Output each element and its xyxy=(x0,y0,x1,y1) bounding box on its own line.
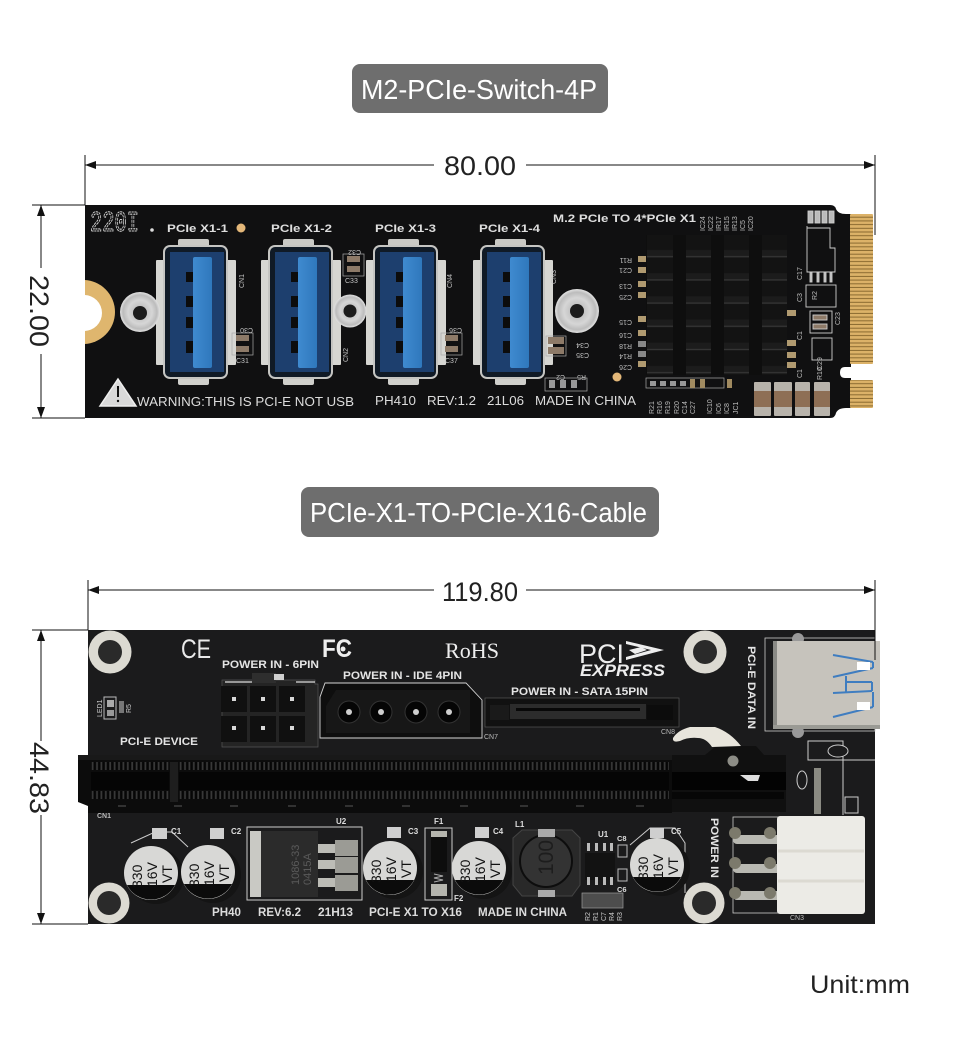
regulator U2 xyxy=(247,817,362,900)
capacitor C4: 330 xyxy=(457,859,473,883)
capacitor C1: C1 xyxy=(171,827,182,836)
U2 chip outline xyxy=(806,211,836,360)
heatsink side components silk: IC10 xyxy=(707,399,714,414)
slot latch xyxy=(672,727,786,812)
capacitor C3: C3 xyxy=(408,827,419,836)
bottom silkscreen text xyxy=(137,394,637,409)
CE mark: CE xyxy=(181,634,211,664)
heatsink side components silk: IR15 xyxy=(724,216,731,231)
small caps silk near USB ports: C36 xyxy=(449,326,462,333)
small caps silk near USB ports: CN1 xyxy=(239,274,246,288)
heatsink side components silk: C17 xyxy=(797,267,804,280)
heatsink side components silk: C26 xyxy=(619,363,632,370)
SATA 15-pin connector xyxy=(484,698,679,741)
capacitor C5: VT xyxy=(665,857,681,875)
heatsink side components silk: C21 xyxy=(619,266,632,273)
capacitor C5: C5 xyxy=(671,827,682,836)
dimension: height 22.00 xyxy=(24,205,85,418)
capacitor C5: 330 xyxy=(635,856,651,880)
small caps silk near USB ports: C31 xyxy=(236,358,249,365)
capacitor C3: 16V xyxy=(383,856,399,882)
capacitor C4: C4 xyxy=(493,827,504,836)
port labels: M.2 PCIe TO 4*PCIe X1 xyxy=(553,213,696,225)
heatsink side components silk: R14 xyxy=(619,352,632,359)
port labels xyxy=(167,213,696,235)
dimension: height 44.83: 44.83 xyxy=(24,742,54,814)
heatsink side components silk xyxy=(619,216,842,414)
SATA 15-pin connector: CN7 xyxy=(484,734,498,741)
small caps silk near USB ports: C32 xyxy=(348,248,361,255)
small caps silk near USB ports: C37 xyxy=(445,358,458,365)
chip U1: U1 xyxy=(598,830,609,839)
capacitor C2: VT xyxy=(216,864,232,882)
heatsink side components silk: IC8 xyxy=(724,403,731,414)
heatsink side components silk: IC22 xyxy=(708,216,715,231)
IDE 4-pin Molex connector xyxy=(320,683,482,738)
heatsink side components silk: IR13 xyxy=(732,216,739,231)
board outline xyxy=(85,205,851,418)
USB port 1 xyxy=(156,239,236,385)
bottom silkscreen text: PH410 xyxy=(375,394,416,408)
small caps silk near USB ports: CN2 xyxy=(343,348,350,362)
capacitor C4: VT xyxy=(487,860,503,878)
heatsink side components silk: C14 xyxy=(682,401,689,414)
heatsink side components silk: R18 xyxy=(619,342,632,349)
PCI Express logo: PCI xyxy=(579,639,624,669)
heading pill: M2-PCIe-Switch-4P: M2-PCIe-Switch-4P xyxy=(361,74,597,105)
chip U1: C8 xyxy=(617,834,627,843)
chip U1 xyxy=(585,830,627,894)
bottom silkscreen text: MADE IN CHINA xyxy=(535,394,637,408)
heatsink side components silk: C1 xyxy=(797,331,804,340)
small caps silk near USB ports xyxy=(232,248,589,391)
heatsink side components silk: C23 xyxy=(835,312,842,325)
6-pin power header: CN3 xyxy=(790,915,804,922)
heading pill: PCIe-X1-TO-PCIe-X16-Cable: PCIe-X1-TO-PCIe-X16-Cable xyxy=(310,497,647,528)
6-pin power header xyxy=(729,816,865,922)
heatsink side components silk: C29 xyxy=(817,357,824,370)
capacitor C5: 16V xyxy=(650,853,666,879)
dimension: height 44.83 xyxy=(24,630,88,924)
port labels: PCIe X1-1 xyxy=(167,223,228,235)
regulator U2: 0415A xyxy=(302,853,314,885)
heatsink side components silk: R16 xyxy=(657,401,664,414)
capacitor C2: 16V xyxy=(201,860,217,886)
capacitor C1: VT xyxy=(159,865,175,883)
heatsink side components silk: IC24 xyxy=(700,216,707,231)
dimension: height 22.00: 22.00 xyxy=(24,275,54,347)
connector labels: POWER IN - IDE 4PIN xyxy=(343,670,462,682)
heatsink side components silk: IC6 xyxy=(716,403,723,414)
standoff 2 xyxy=(334,294,366,328)
PCIe riser board xyxy=(78,630,880,924)
LED silk xyxy=(97,697,133,719)
regulator U2: 1086-33 xyxy=(290,845,302,885)
capacitor C4: 16V xyxy=(472,856,488,882)
capacitor C2 xyxy=(181,827,242,903)
heatsink side components silk: C16 xyxy=(619,331,632,338)
mounting holes xyxy=(88,630,726,924)
small resistors R1-R4: R3 xyxy=(617,912,624,921)
PCI Express logo xyxy=(579,639,665,680)
heatsink side components silk: IR17 xyxy=(716,216,723,231)
regulator U2: U2 xyxy=(336,817,347,826)
heatsink side components silk: JC1 xyxy=(733,401,740,414)
connector labels: POWER IN - SATA 15PIN xyxy=(511,686,648,698)
connector labels: POWER IN - 6PIN xyxy=(222,659,319,671)
heatsink side components silk: IC20 xyxy=(748,216,755,231)
PCI Express logo: EXPRESS xyxy=(580,662,665,680)
board base xyxy=(88,630,875,924)
fuse F1 / F2: F2 xyxy=(454,894,464,903)
silkscreen text: bottom row: 21H13 xyxy=(318,907,353,919)
capacitor C1: 330 xyxy=(129,864,145,888)
small caps silk near USB ports: C30 xyxy=(240,326,253,333)
fuse F1 / F2: F1 xyxy=(434,817,444,826)
port labels: PCIe X1-4 xyxy=(479,223,541,235)
USB port 3 xyxy=(366,239,446,385)
inductor L1: 100 xyxy=(535,840,558,875)
small resistors R1-R4 xyxy=(582,893,624,921)
heatsink side components silk: R20 xyxy=(674,401,681,414)
silkscreen text: bottom row xyxy=(212,907,567,919)
SMD resistors row xyxy=(754,382,830,416)
heatsink side components silk: C25 xyxy=(619,293,632,300)
RoHS mark: RoHS xyxy=(445,638,499,663)
silkscreen text: bottom row: PH40 xyxy=(212,907,241,919)
M.2 adapter board xyxy=(51,205,873,418)
heatsink side components silk: R10 xyxy=(817,367,824,380)
heatsink side components silk: C3 xyxy=(797,293,804,302)
SATA 15-pin connector: CN8 xyxy=(661,729,675,736)
heatsink side components silk: C13 xyxy=(619,282,632,289)
small caps silk near USB ports: R5 xyxy=(577,373,586,380)
small caps silk near USB ports: C35 xyxy=(576,351,589,358)
USB port 4 xyxy=(473,239,553,385)
dimension: width 119.80 xyxy=(88,577,875,630)
LED silk: LED1 xyxy=(97,699,104,717)
port labels: PCIe X1-3 xyxy=(375,223,436,235)
small resistors R1-R4: R2 xyxy=(585,912,592,921)
capacitor C3: 330 xyxy=(368,859,384,883)
heatsink side components silk: C1 xyxy=(797,369,804,378)
capacitor C4 xyxy=(452,827,512,899)
heatsink xyxy=(646,235,787,375)
small caps silk near USB ports: C2 xyxy=(556,373,565,380)
mounting notch with gold ring xyxy=(85,280,115,344)
warning triangle xyxy=(100,379,136,406)
heatsink side components silk: R19 xyxy=(665,401,672,414)
serial silk mark: 220I xyxy=(90,207,139,240)
heatsink side components silk: C27 xyxy=(690,401,697,414)
heatsink side components silk: IC5 xyxy=(740,220,747,231)
right-side silk outline xyxy=(797,741,875,815)
silkscreen text: bottom row: PCI-E X1 TO X16 xyxy=(369,907,462,919)
heatsink side components silk: R2 xyxy=(812,291,819,300)
bottom silkscreen text: 21L06 xyxy=(487,394,524,408)
connector labels: PCI-E DATA IN xyxy=(745,646,757,729)
gold fingers xyxy=(850,214,873,408)
slot notches xyxy=(118,805,644,807)
small resistors R1-R4: C7 xyxy=(601,912,608,921)
bottom silkscreen text: REV:1.2 xyxy=(427,394,476,408)
LED silk: R5 xyxy=(126,704,133,713)
small caps silk near USB ports: C34 xyxy=(576,341,589,348)
capacitor C1: 16V xyxy=(144,861,160,887)
capacitor C2: C2 xyxy=(231,827,242,836)
connector labels: POWER IN xyxy=(708,818,720,878)
bottom silkscreen text: WARNING:THIS IS PCI-E NOT USB xyxy=(137,395,354,409)
PCIe X16 slot xyxy=(78,755,672,813)
small resistors R1-R4: R1 xyxy=(593,912,600,921)
unit note: Unit:mm xyxy=(810,971,910,999)
silkscreen text: bottom row: MADE IN CHINA xyxy=(478,907,567,919)
port labels: PCIe X1-2 xyxy=(271,223,332,235)
capacitor C3 xyxy=(363,827,423,899)
heading pill: M2-PCIe-Switch-4P xyxy=(352,64,608,113)
6-pin power connector xyxy=(221,673,318,747)
dimension: width 80.00: 80.00 xyxy=(444,151,516,181)
heading pill: PCIe-X1-TO-PCIe-X16-Cable xyxy=(301,487,659,537)
small resistors R1-R4: R4 xyxy=(609,912,616,921)
silkscreen text: bottom row: REV:6.2 xyxy=(258,907,301,919)
heatsink side components silk: R11 xyxy=(620,256,632,263)
PCIe riser board: CN1 xyxy=(97,813,111,820)
small caps silk near USB ports: CN4 xyxy=(447,274,454,288)
capacitor C3: VT xyxy=(398,860,414,878)
connector labels: PCI-E DEVICE xyxy=(120,736,198,748)
capacitor C2: 330 xyxy=(186,863,202,887)
small caps silk near USB ports: C33 xyxy=(345,278,358,285)
capacitor C1 xyxy=(124,827,188,904)
dimension: width 119.80: 119.80 xyxy=(442,577,518,607)
FCC mark: FC xyxy=(322,635,352,663)
connector labels xyxy=(120,646,757,878)
dimension: width 80.00 xyxy=(85,151,875,235)
USB port 2 xyxy=(261,239,341,385)
fuse F1 / F2 xyxy=(425,817,464,903)
heatsink side components silk: R21 xyxy=(649,401,656,414)
standoff 1 xyxy=(120,292,160,332)
capacitor C5 xyxy=(630,827,690,896)
heatsink side components silk: C15 xyxy=(619,318,632,325)
small caps silk near USB ports: CN3 xyxy=(551,270,558,284)
inductor L1: L1 xyxy=(515,820,525,829)
USB 3.0 input connector xyxy=(765,630,880,738)
standoff 3 xyxy=(555,289,599,333)
inductor L1 xyxy=(513,820,580,897)
chip U1: C6 xyxy=(617,885,627,894)
